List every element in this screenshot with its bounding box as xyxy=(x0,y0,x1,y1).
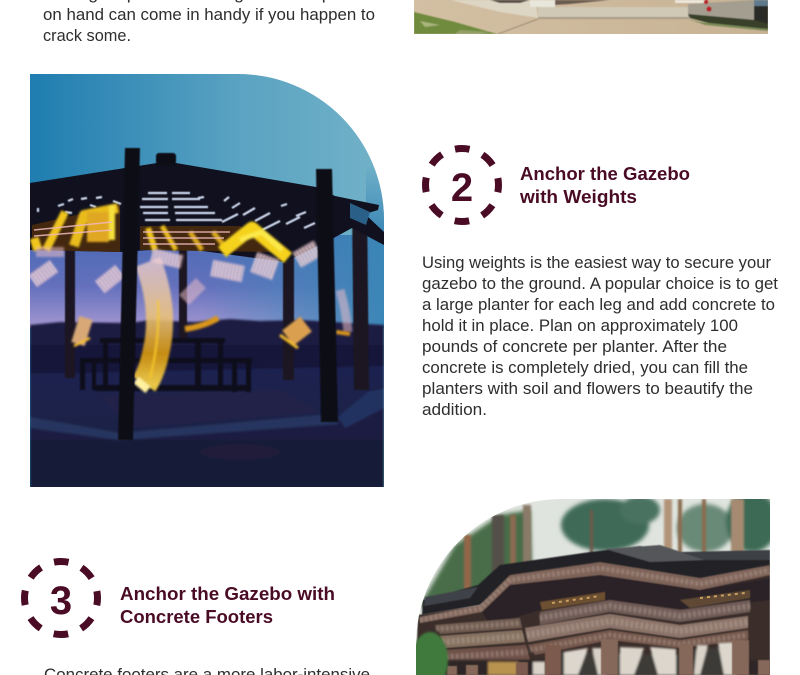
heading: step 2: Anchor the Gazebo xyxy=(520,163,690,184)
bush xyxy=(412,632,448,675)
text block: step 2: concrete is completely dried, you can fill the xyxy=(422,359,748,377)
roof and lattice xyxy=(30,163,384,262)
light trails: main streak xyxy=(74,262,350,390)
heading: step 2 xyxy=(519,163,690,207)
light trails: yellow lattice glow xyxy=(34,205,288,258)
text block: step 2: gazebo to the ground. A popular choice is to get xyxy=(422,275,778,293)
text block: step 2: planters with soil and flowers to beautify the xyxy=(422,380,753,398)
forest backdrop xyxy=(420,492,778,610)
text block: step 2: addition. xyxy=(422,401,487,419)
eaves xyxy=(416,562,770,675)
ground and deck xyxy=(30,319,384,490)
photo: gazebo with light trails at dusk xyxy=(30,74,384,490)
badge: step 2 xyxy=(426,148,498,222)
back posts xyxy=(64,228,370,390)
table and benches xyxy=(80,338,252,392)
badge: step 3 xyxy=(24,562,98,634)
heading: step 3: Concrete Footers xyxy=(120,606,273,627)
ornament rows xyxy=(420,568,770,657)
text block: step 2: hold it in place. Plan on approximately 100 xyxy=(422,317,738,335)
text block: step 2: a large planter for each leg and add concrete to xyxy=(422,296,775,314)
front posts xyxy=(118,148,338,440)
columns and curtains xyxy=(445,642,770,675)
text block: step 2: Using weights is the easiest way to secure your xyxy=(422,254,771,272)
roof xyxy=(422,545,770,615)
text block: step 2: pounds of concrete per planter. After the xyxy=(422,338,727,356)
heading: step 3 xyxy=(120,583,335,627)
text block: end of step 1: on hand can come in handy if you happen to xyxy=(43,6,375,24)
text block: end of step 1 xyxy=(43,0,375,45)
text block: end of step 1: crack some. xyxy=(43,27,131,45)
heading: step 3: Anchor the Gazebo with xyxy=(120,583,335,604)
badge: step 2: 2 xyxy=(451,166,473,210)
photo: ornate wooden gazebo among pines xyxy=(412,492,778,675)
text block: step 2 xyxy=(422,254,778,419)
photo: paved gazebo base (cropped) xyxy=(414,0,768,34)
light trails: pink fans xyxy=(33,248,348,332)
badge: step 3: 3 xyxy=(50,579,72,623)
heading: step 2: with Weights xyxy=(519,186,637,207)
